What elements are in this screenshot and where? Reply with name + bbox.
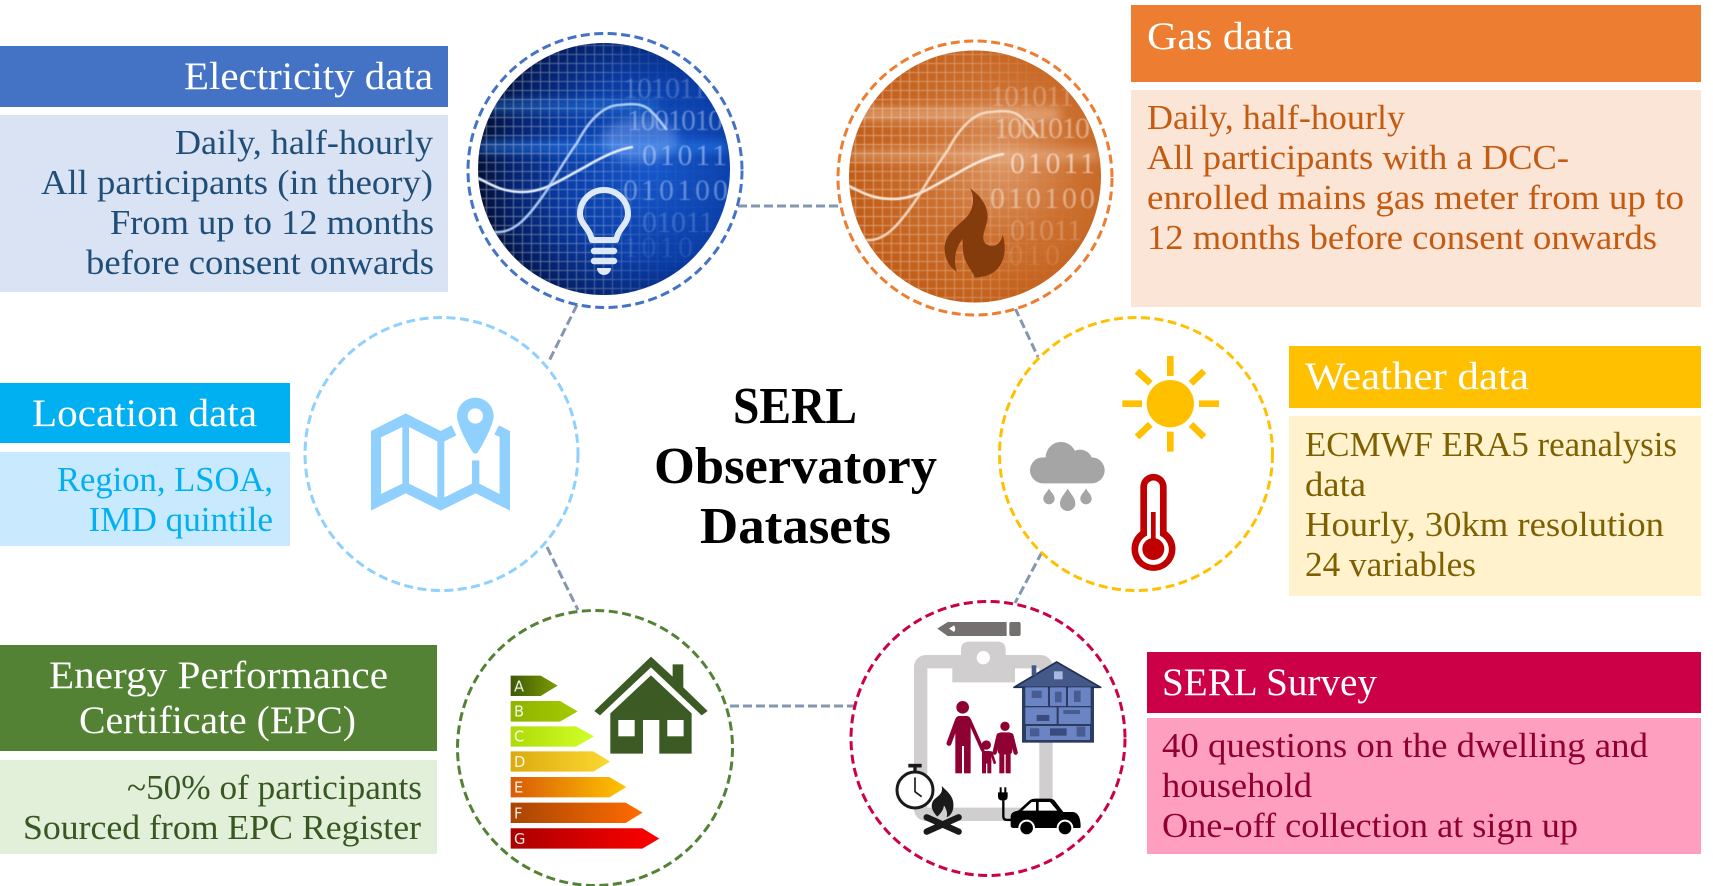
text block: weather details: data [1305, 465, 1366, 504]
text block: gas details: All participants with a DCC- [1147, 138, 1569, 177]
icon: electricity circle with light bulb: 01011 [642, 139, 727, 172]
text block: gas details: 12 months before consent onwards [1147, 218, 1657, 257]
icon: EPC circle with rating bars and house [458, 610, 732, 886]
icon: campfire [927, 786, 959, 832]
text block: gas details: enrolled mains gas meter from up to [1147, 178, 1684, 217]
heading: energy performance certificate: Certificate (EPC) [79, 699, 356, 742]
connector lines between dataset circles [547, 206, 1042, 706]
icon: rain cloud [1030, 442, 1105, 511]
icon: electricity circle with light bulb: 010100 [623, 174, 728, 207]
icon: electricity circle with light bulb: 101011 [623, 72, 707, 105]
text block: EPC details: Sourced from EPC Register [23, 808, 421, 847]
text block: survey details [1147, 718, 1701, 854]
icon: gas circle with flame: 1010 [990, 239, 1060, 272]
heading: gas data: Gas data [1147, 15, 1293, 58]
chart: energy rating arrows [511, 676, 659, 849]
icon: electricity circle with light bulb [468, 30, 742, 310]
icon: gas circle with flame: 01011 [1010, 147, 1095, 180]
text block: electricity details: Daily, half-hourly [175, 123, 434, 162]
chart: energy rating arrows: F [514, 805, 522, 822]
text block: gas details: Daily, half-hourly [1147, 98, 1406, 137]
heading: SERL survey: SERL Survey [1162, 661, 1377, 704]
text block: survey details: household [1162, 766, 1313, 805]
heading: electricity data [0, 46, 448, 107]
chart: energy rating arrows: E [514, 780, 523, 797]
panel: electricity data [0, 46, 448, 292]
icon: survey circle [851, 602, 1125, 876]
panel: SERL survey [1147, 652, 1701, 854]
icon: house [594, 657, 708, 754]
panel: energy performance certificate [0, 645, 437, 854]
chart: energy rating arrows: C [514, 729, 524, 746]
icon: gas circle with flame: 101011 [990, 80, 1074, 113]
text block: gas details [1131, 90, 1701, 307]
icon: electricity circle with light bulb: 1010 [623, 231, 693, 264]
heading: weather data [1289, 346, 1701, 408]
icon: gas circle with flame [838, 38, 1112, 318]
icon: electricity circle with light bulb: 01011 [642, 206, 714, 239]
chart: energy rating arrows: G [514, 831, 525, 848]
icon: stopwatch [897, 766, 933, 808]
title: Datasets [700, 498, 891, 555]
icon: location circle with map and pin [305, 318, 578, 590]
icon: pencil [937, 622, 1021, 636]
heading: SERL survey [1147, 652, 1701, 713]
panel: gas data [1131, 5, 1701, 307]
text block: location details: Region, LSOA, [57, 460, 273, 499]
heading: weather data: Weather data [1305, 355, 1529, 398]
heading: energy performance certificate [0, 645, 437, 751]
text block: weather details: ECMWF ERA5 reanalysis [1305, 425, 1677, 464]
text block: electricity details [0, 115, 448, 292]
title: SERL [733, 378, 857, 435]
icon: gas circle with flame: 1001010 [994, 112, 1090, 145]
text block: EPC details: ~50% of participants [127, 768, 422, 807]
text block: location details [0, 452, 290, 546]
text block: location details: IMD quintile [88, 500, 273, 539]
text block: survey details: One-off collection at sign up [1162, 806, 1578, 845]
icon: gas circle with flame: 01011 [1010, 214, 1082, 247]
text block: weather details: 24 variables [1305, 545, 1476, 584]
panel: location data [0, 383, 290, 546]
text block: electricity details: before consent onwards [86, 243, 434, 282]
icon: light bulb [580, 190, 628, 261]
icon: dwelling cross-section [1014, 662, 1101, 743]
panel: weather data [1289, 346, 1701, 596]
title: Observatory [654, 438, 937, 495]
heading: location data: Location data [32, 392, 257, 435]
icon: sun [1122, 356, 1219, 452]
text block: EPC details [0, 760, 437, 854]
chart: energy rating arrows: D [514, 754, 525, 771]
icon: flame [945, 188, 1005, 278]
heading: energy performance certificate: Energy Performance [49, 654, 388, 697]
title [654, 378, 937, 555]
text block: weather details [1289, 416, 1701, 596]
heading: gas data [1131, 5, 1701, 82]
text block: survey details: 40 questions on the dwelling and [1162, 726, 1649, 765]
text block: electricity details: All participants (in theory) [41, 163, 433, 202]
icon: weather circle [1000, 318, 1272, 590]
icon: clipboard [921, 642, 1046, 814]
icon: thermometer [1131, 474, 1175, 571]
chart: energy rating arrows: A [514, 678, 524, 695]
icon: electricity circle with light bulb: 1001010 [627, 104, 723, 137]
chart: energy rating arrows: B [514, 704, 524, 721]
text block: electricity details: From up to 12 months [110, 203, 434, 242]
icon: family [949, 701, 1016, 773]
icon: gas circle with flame: 010100 [990, 182, 1095, 215]
heading: electricity data: Electricity data [184, 55, 433, 98]
heading: location data [0, 383, 290, 443]
icon: electric car [998, 787, 1081, 836]
text block: weather details: Hourly, 30km resolution [1305, 505, 1664, 544]
